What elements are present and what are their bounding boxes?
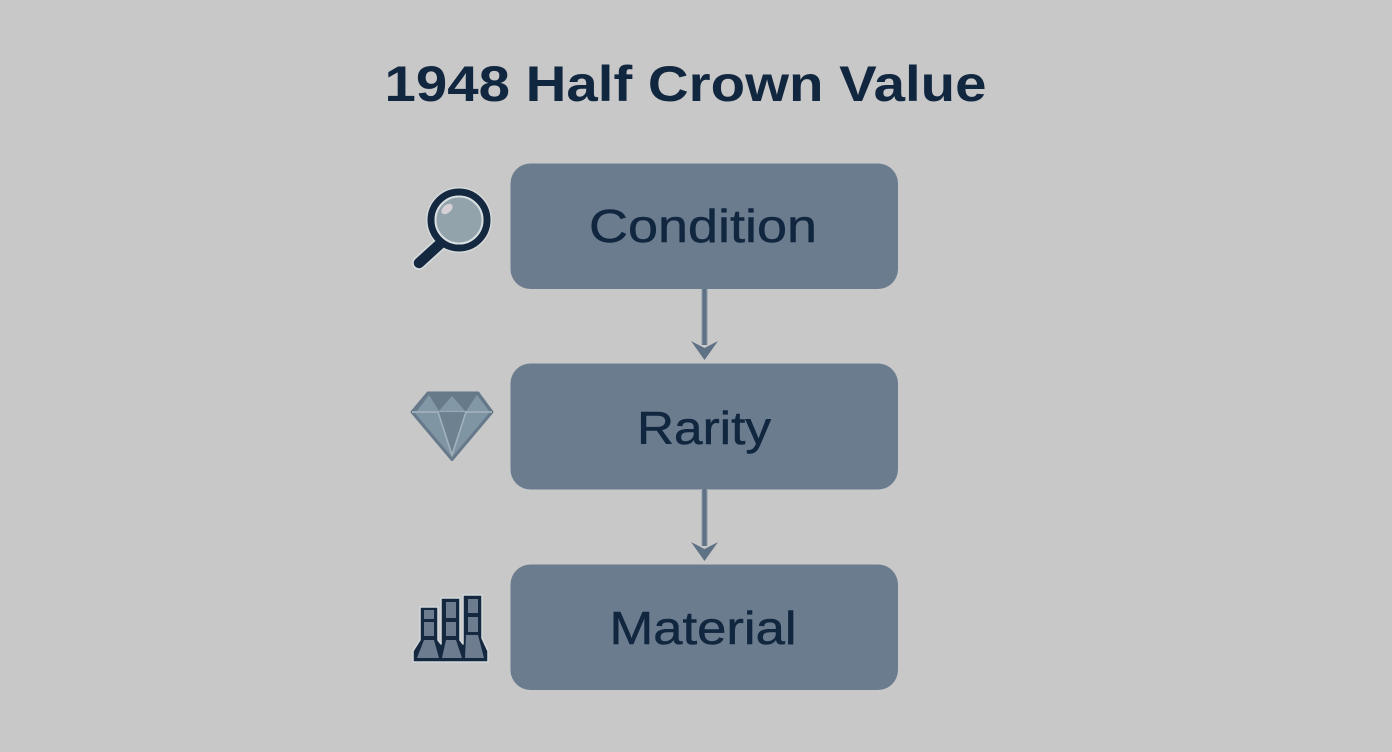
icon: material columns [413, 595, 488, 662]
arrow: rarity to material [691, 489, 718, 561]
icon: diamond [412, 393, 492, 460]
icon: magnifying glass [419, 187, 492, 263]
panel: condition [510, 164, 898, 289]
label: condition: Condition [589, 200, 817, 252]
panel: material [510, 564, 898, 690]
arrow: condition to rarity [691, 289, 718, 360]
label: rarity: Rarity [637, 402, 771, 454]
panel: rarity [510, 364, 898, 490]
title: 1948 Half Crown Value [384, 55, 986, 112]
label: material: Material [610, 602, 796, 654]
